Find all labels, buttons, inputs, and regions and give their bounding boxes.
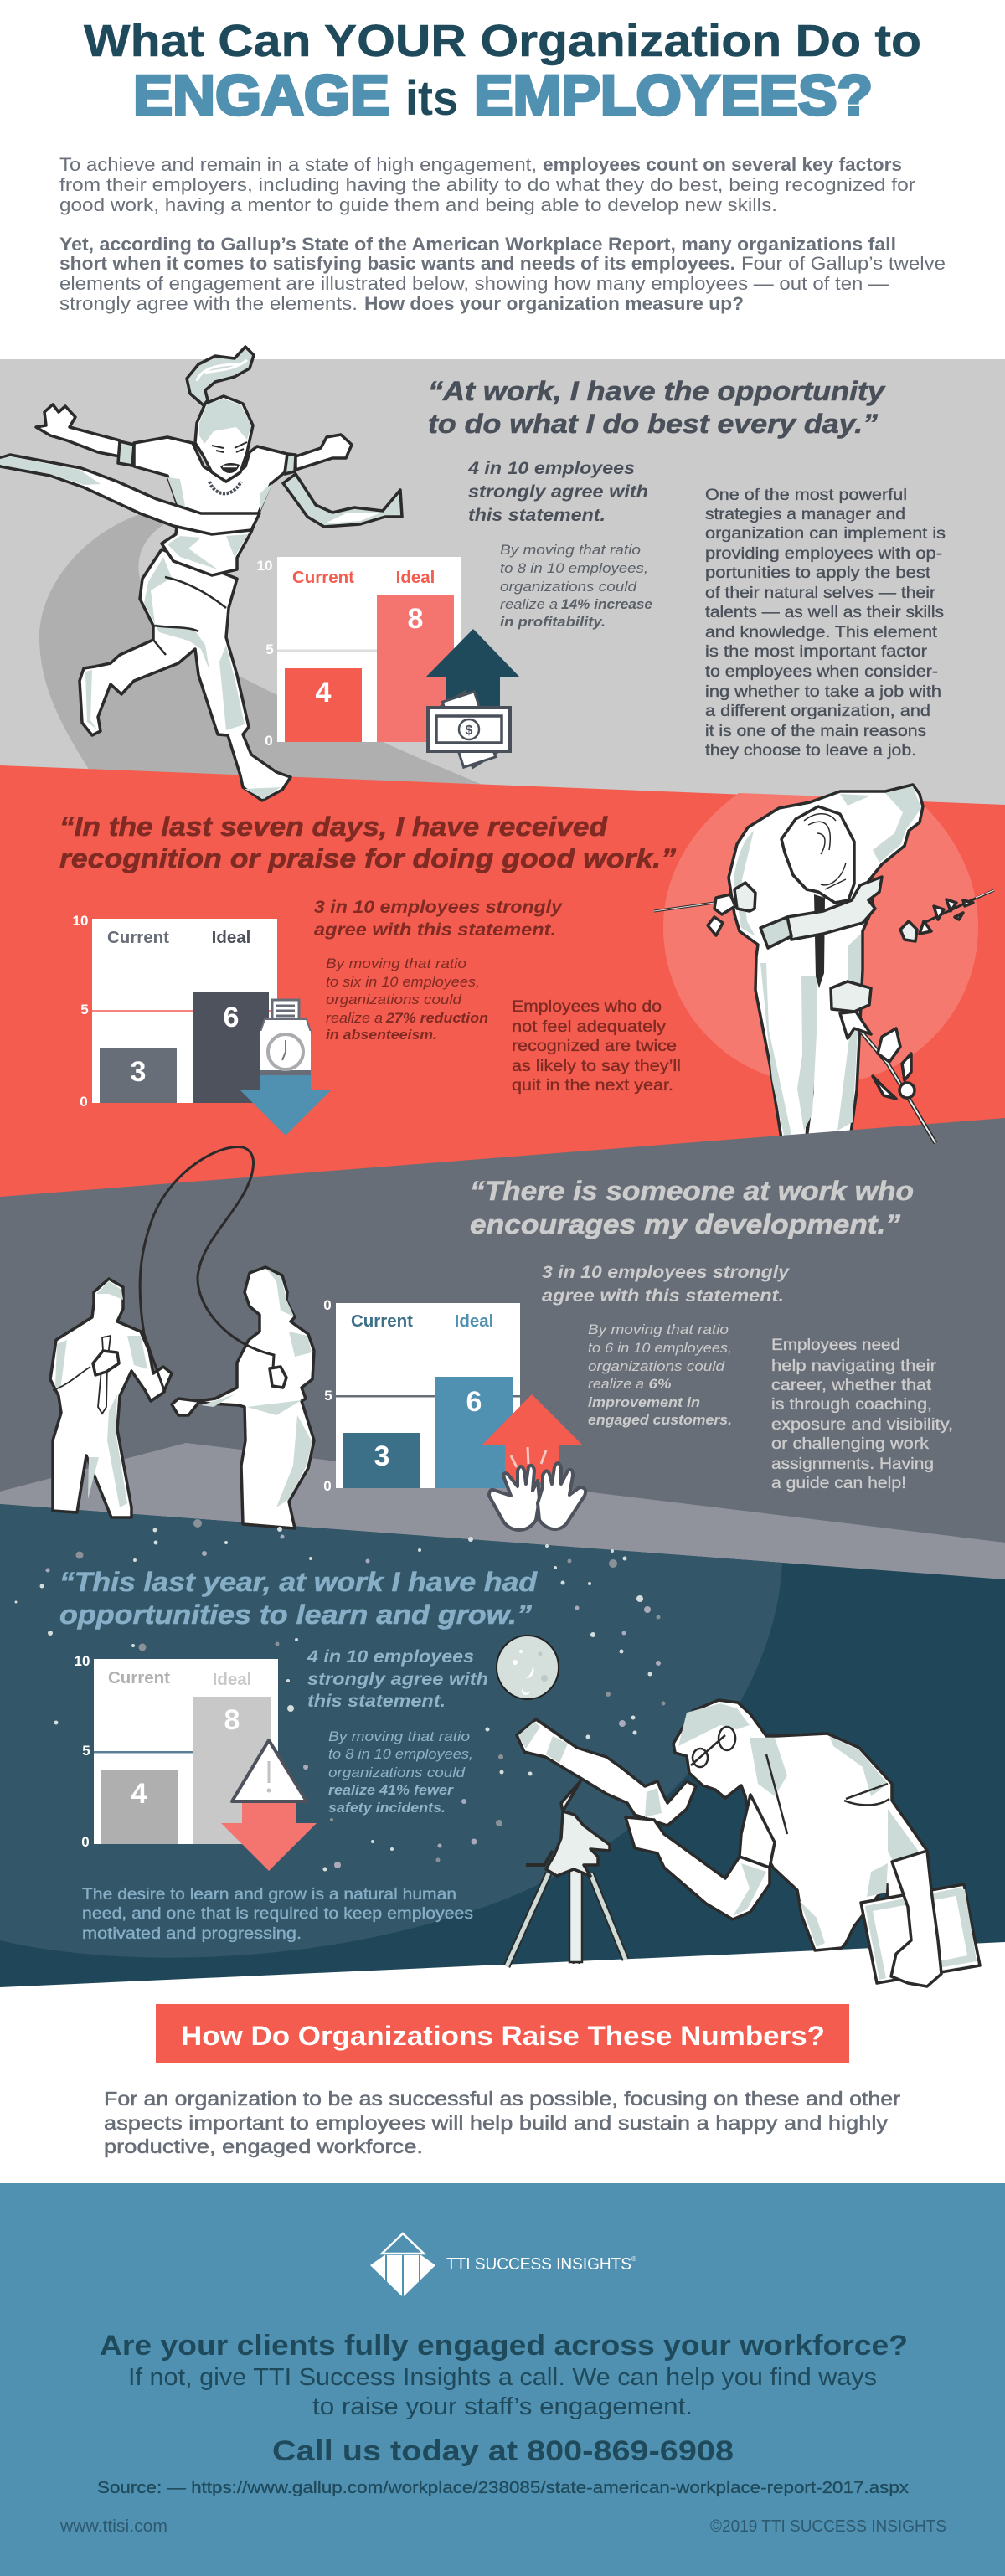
section 1 benefit text: realize a (500, 597, 558, 612)
call to action: to raise your staff’s engagement. (312, 2393, 693, 2420)
section 4 body text (82, 1885, 473, 1943)
bar chart: section 4: Ideal (213, 1670, 251, 1689)
section 1 body text: of their natural selves — their (705, 584, 936, 602)
tube shading (518, 1722, 662, 1817)
section 2 benefit text: By moving that ratio (326, 956, 466, 971)
section 3 benefit text: improvement in (588, 1395, 700, 1410)
left arm (36, 404, 120, 456)
section 4 body text: need, and one that is required to keep employees (82, 1904, 473, 1923)
intro text: short when it comes to satisfying basic wants and needs of its employees. (59, 253, 735, 274)
section 1 body text: providing employees with op- (705, 544, 942, 563)
section 3 body text: career, whether that (771, 1376, 932, 1394)
torso shading (168, 477, 272, 569)
title: ENGAGE (133, 64, 389, 127)
section 2 heading quote (59, 811, 676, 873)
left rose (654, 883, 755, 935)
section 1 benefit text: organizations could (500, 580, 637, 595)
section 2 stat: agree with this statement. (314, 920, 556, 940)
illustration: runner crossing finish ribbon (0, 347, 402, 801)
bar chart: section 1: 4 (316, 677, 332, 708)
woman shading (201, 1269, 312, 1507)
illustration: man with telescope (507, 1700, 980, 1986)
bar chart: section 2: Current (107, 928, 169, 947)
bar chart: section 3 (323, 1297, 520, 1494)
section 3 body text: help navigating their (771, 1357, 937, 1375)
section 3 heading quote (470, 1176, 914, 1239)
telescope tube (517, 1719, 696, 1826)
illustration: long rose stem (831, 981, 935, 1143)
bar chart: section 3: 6 (466, 1386, 482, 1418)
logo: ® (631, 2255, 636, 2263)
front arm (626, 1817, 770, 1919)
section 1 benefit text (500, 543, 652, 630)
bar chart: section 1: Current (292, 568, 354, 587)
section 1 body text: organization can implement is (705, 524, 946, 543)
section 4 stars (15, 1519, 665, 1871)
section 4 benefit text: realize 41% fewer (328, 1783, 455, 1798)
intro text: To achieve and remain in a state of high engagement, (59, 154, 537, 175)
red banner (156, 2004, 849, 2063)
short sleeve (740, 1795, 775, 1868)
section 3 body text: Employees need (771, 1336, 900, 1354)
sleeve cuff (760, 917, 791, 948)
section 3 body text: assignments. Having (771, 1455, 934, 1473)
section 3 body text: a guide can help! (771, 1474, 906, 1492)
section 1 body text: they choose to leave a job. (705, 741, 916, 760)
section 3 body text: or challenging work (771, 1435, 929, 1453)
section 3 body text (771, 1336, 953, 1492)
bar chart: section 2: Ideal (212, 928, 250, 947)
section 1 body text: talents — as well as their skills (705, 603, 944, 621)
man tie (98, 1336, 111, 1414)
website: www.ttisi.com (59, 2517, 168, 2536)
section 2 benefit text (326, 956, 488, 1043)
ribbon tail (283, 474, 402, 527)
arm with folder (891, 1851, 941, 1986)
front arm shading (733, 1863, 766, 1916)
bar chart: section 3: 0 (323, 1478, 332, 1494)
intro text: How does your organization measure up? (364, 293, 744, 314)
bar chart: section 2 (73, 913, 277, 1110)
section 2 stat: 3 in 10 employees strongly (314, 897, 563, 917)
panel: background red section (0, 765, 1005, 1206)
bar chart: section 3: Ideal (455, 1311, 493, 1331)
section 2 body text: recognized are twice (512, 1037, 677, 1055)
hair and face (781, 806, 854, 903)
bar chart: section 1: Ideal (396, 568, 435, 587)
copyright: ©2019 TTI SUCCESS INSIGHTS (710, 2517, 946, 2536)
section 2 benefit text: realize a (326, 1011, 383, 1026)
intro text: strongly agree with the elements. (59, 293, 358, 314)
section 1 benefit text: in profitability. (500, 615, 606, 630)
section 2 stat (314, 897, 563, 940)
man shading (678, 1703, 928, 1947)
woman (172, 1267, 314, 1528)
bar chart: section 3: 5 (324, 1388, 332, 1404)
closing paragraph: For an organization to be as successful as possible, focusing on these and other (104, 2088, 900, 2110)
forearm (787, 877, 882, 940)
bar chart: section 4: 5 (82, 1743, 90, 1759)
section 1 stat: 4 in 10 employees (467, 458, 635, 478)
man body (673, 1700, 941, 1968)
bar chart: section 1: 10 (257, 558, 272, 574)
title: What Can YOUR Organization Do to (84, 16, 921, 66)
intro text: from their employers, including having the ability to do what they do best, being recognized for (59, 174, 915, 195)
call to action: Are your clients fully engaged across your workforce? (100, 2330, 908, 2362)
leg shading (85, 557, 281, 799)
bar chart: section 4: 10 (75, 1653, 90, 1669)
logo (370, 2233, 636, 2297)
section 2 benefit text: in absenteeism. (326, 1028, 437, 1043)
title: its (405, 71, 458, 126)
section 4 benefit text: to 8 in 10 employees, (328, 1747, 473, 1762)
woman hand (270, 1367, 286, 1388)
title (84, 16, 921, 127)
arrow: profitability up (425, 629, 520, 712)
section 4 benefit text (328, 1729, 473, 1816)
section 2 heading quote: recognition or praise for doing good work.” (59, 843, 676, 873)
ponytail (187, 347, 254, 405)
red banner: How Do Organizations Raise These Numbers? (181, 2021, 825, 2051)
call to action (100, 2330, 908, 2467)
section 3 benefit text: By moving that ratio (588, 1322, 729, 1337)
section 2 body text: quit in the next year. (512, 1076, 673, 1095)
section 1 body text (705, 486, 946, 760)
bar chart: section 2: 10 (73, 913, 88, 929)
section 2 benefit text: 27% reduction (385, 1011, 488, 1026)
ribbon shade (0, 456, 100, 485)
bar chart: section 1: 0 (265, 733, 273, 749)
section 4 body text: The desire to learn and grow is a natural human (82, 1885, 456, 1904)
intro text: elements of engagement are illustrated below, showing how many employees — out of ten — (59, 273, 889, 294)
icon: time clock (260, 1000, 311, 1075)
section 3 stat (542, 1262, 790, 1306)
ponytail strands (197, 360, 247, 381)
section 2 benefit text: to six in 10 employees, (326, 975, 480, 990)
man (50, 1279, 172, 1517)
section 3 stat: agree with this statement. (542, 1285, 784, 1306)
section 1 body text: ing whether to take a job with (705, 683, 941, 701)
bar chart: section 3: 3 (374, 1440, 389, 1472)
right rose (900, 890, 994, 941)
intro text: Yet, according to Gallup’s State of the American Workplace Report, many organizations fall (59, 234, 896, 255)
section 2 body text: as likely to say they’ll (512, 1057, 681, 1075)
icon: high five hands (489, 1447, 585, 1530)
ribbon across body (0, 455, 260, 534)
panel: background dark gray section (0, 1118, 1005, 1591)
arrow: absenteeism down (240, 1074, 331, 1136)
section 4 stat: this statement. (307, 1691, 446, 1711)
head (195, 396, 253, 482)
section 3 benefit text: engaged customers. (588, 1413, 732, 1428)
hair strands (804, 814, 846, 889)
closing paragraph (104, 2088, 900, 2157)
section 1 body text: is the most important factor (705, 642, 928, 661)
illustration: moon (497, 1636, 559, 1699)
man body (729, 785, 923, 1139)
section 3 benefit text: realize a (588, 1377, 644, 1392)
bar chart: section 2: 0 (80, 1094, 88, 1110)
logo: TTI SUCCESS INSIGHTS (446, 2255, 631, 2274)
section 2 body text (512, 997, 681, 1095)
bar chart: section 1: 8 (408, 603, 423, 635)
closing paragraph: aspects important to employees will help build and sustain a happy and highly (104, 2112, 889, 2134)
intro text: employees count on several key factors (543, 154, 902, 175)
illustration: bent man with roses (654, 785, 994, 1139)
intro text (59, 154, 946, 314)
section 4 heading quote: opportunities to learn and grow.” (59, 1600, 532, 1630)
section 1 body text: it is one of the main reasons (705, 722, 926, 740)
section 4 body text: motivated and progressing. (82, 1924, 302, 1943)
section 2 body text: Employees who do (512, 997, 662, 1016)
closing paragraph: productive, engaged workforce. (104, 2136, 423, 2157)
bar chart: section 2: 5 (80, 1002, 89, 1018)
section 1 body text: and knowledge. This element (705, 623, 938, 641)
arrow: customers up (482, 1394, 582, 1482)
section 3 benefit text: 6% (648, 1377, 672, 1392)
section 3 body text: is through coaching, (771, 1395, 932, 1414)
bar chart: section 3: 0 (323, 1297, 332, 1313)
necklace (209, 482, 241, 493)
section 4 stat (307, 1646, 488, 1711)
section 3 body text: exposure and visibility, (771, 1415, 953, 1434)
section 1 benefit text: 14% increase (561, 597, 652, 612)
bar chart: section 4: Current (108, 1668, 170, 1687)
jump rope (140, 1147, 274, 1393)
legs (80, 549, 291, 801)
man shading (55, 1281, 147, 1507)
crank (526, 1851, 553, 1865)
thigh lines (153, 577, 226, 655)
panel: background gray section (0, 359, 1005, 812)
section 1 heading quote (428, 376, 886, 439)
icon: money bills: $ (466, 724, 473, 738)
section 1 benefit text: to 8 in 10 employees, (500, 561, 648, 576)
section 1 benefit text: By moving that ratio (500, 543, 641, 558)
bar chart: section 1: 5 (265, 641, 274, 657)
section 3 stat: 3 in 10 employees strongly (542, 1262, 790, 1282)
section 4 stat: strongly agree with (307, 1669, 488, 1689)
bar chart: section 1 (257, 557, 461, 749)
section 4 stat: 4 in 10 employees (307, 1646, 474, 1667)
section 4 heading quote: “This last year, at work I have had (59, 1567, 539, 1597)
icon: warning triangle (232, 1740, 307, 1801)
bar chart: section 4: 8 (224, 1704, 240, 1736)
bar chart: section 2: 6 (224, 1002, 239, 1033)
panel: background navy section (0, 1504, 1005, 1987)
illustration: man and woman with jump rope (50, 1147, 314, 1528)
section 1 heading quote: to do what I do best every day.” (428, 409, 878, 439)
man hand (93, 1351, 119, 1375)
section 4 benefit text: By moving that ratio (328, 1729, 470, 1744)
title: EMPLOYEES? (474, 64, 873, 127)
call to action: If not, give TTI Success Insights a call. We can help you find ways (128, 2364, 877, 2391)
intro text: good work, having a mentor to guide them and being able to develop new skills. (59, 194, 777, 215)
section 2 body text: not feel adequately (512, 1018, 666, 1036)
section 1 body text: a different organization, and (705, 702, 930, 720)
folder (861, 1884, 980, 1983)
bar chart: section 3: Current (351, 1311, 413, 1331)
arrow: safety incidents down (221, 1801, 317, 1871)
source: Source: — https://www.gallup.com/workplace/238085/state-american-workplace-report-2017.aspx (97, 2479, 909, 2497)
section 1 stat: this statement. (468, 505, 606, 525)
icon: money bills (428, 692, 510, 767)
intro text: Four of Gallup’s twelve (741, 253, 946, 274)
bar chart: section 4 (75, 1653, 278, 1850)
telescope mount (546, 1781, 610, 1876)
section 1 body text: One of the most powerful (705, 486, 907, 504)
section 1 stat: strongly agree with (468, 482, 648, 502)
section 1 heading quote: “At work, I have the opportunity (428, 376, 886, 406)
section 3 benefit text (588, 1322, 732, 1428)
sleeve bands (118, 441, 296, 474)
bar chart: section 4: 4 (131, 1778, 147, 1810)
call to action: Call us today at 800-869-6908 (272, 2435, 734, 2467)
panel: footer (0, 2183, 1005, 2576)
section 3 heading quote: encourages my development.” (470, 1209, 900, 1239)
section 2 heading quote: “In the last seven days, I have received (59, 811, 609, 842)
tripod (507, 1863, 626, 1966)
section 1 body text: portunities to apply the best (705, 564, 931, 582)
right arm (296, 435, 352, 470)
section 1 body text: strategies a manager and (705, 505, 905, 523)
section 3 benefit text: to 6 in 10 employees, (588, 1341, 732, 1356)
section 4 heading quote (59, 1567, 539, 1630)
section 1 stat (467, 458, 648, 525)
torso (134, 437, 287, 575)
section 1 body text: to employees when consider- (705, 662, 938, 681)
man shading (734, 786, 921, 1136)
tie (814, 894, 825, 988)
section 3 benefit text: organizations could (588, 1359, 725, 1374)
section 2 benefit text: organizations could (326, 992, 462, 1007)
arm crease (53, 1367, 90, 1390)
section 4 benefit text: safety incidents. (328, 1801, 446, 1816)
section 4 benefit text: organizations could (328, 1765, 466, 1780)
section 3 heading quote: “There is someone at work who (470, 1176, 914, 1206)
ear and glasses (691, 1727, 889, 1834)
bar chart: section 4: 0 (81, 1834, 90, 1850)
bar chart: section 2: 3 (131, 1056, 146, 1088)
